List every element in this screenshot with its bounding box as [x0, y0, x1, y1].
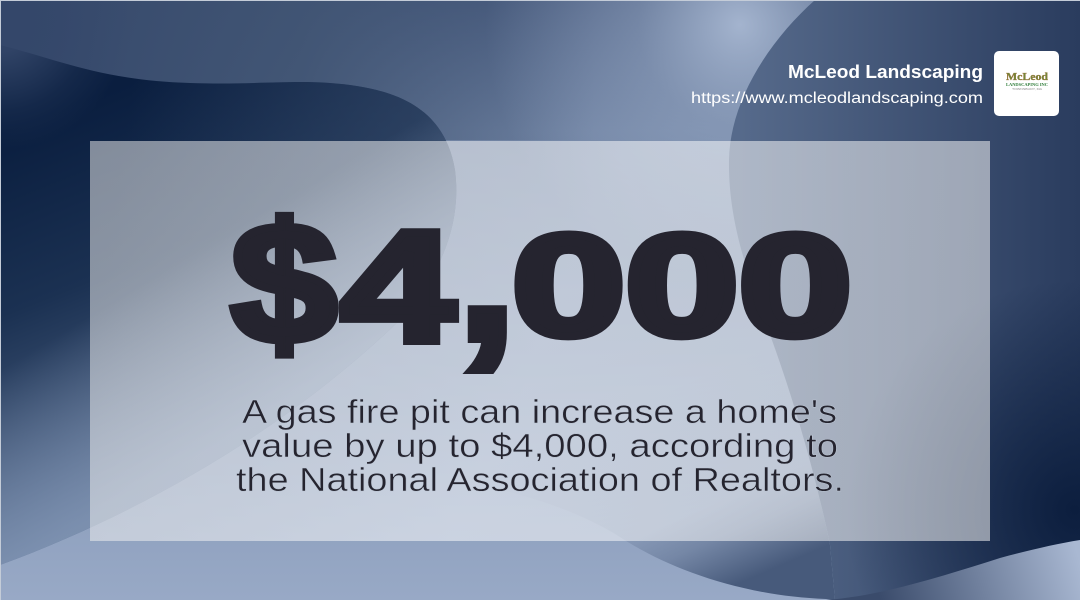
logo badge	[994, 51, 1059, 116]
company name and url	[691, 62, 983, 107]
logo badge: McLeod	[1006, 72, 1048, 83]
description text: value by up to $4,000, according to	[242, 428, 838, 465]
logo badge: TOWNSBURY, MA	[1012, 88, 1042, 91]
description text: the National Association of Realtors.	[236, 462, 844, 499]
headline stat: $4,000: $	[231, 189, 337, 379]
headline stat: $4,000: 4	[341, 199, 455, 375]
logo badge: LANDSCAPING INC	[1006, 82, 1048, 87]
headline stat: $4,000	[231, 159, 852, 382]
headline stat: $4,000: 000	[512, 205, 852, 366]
description text	[236, 394, 844, 499]
company name and url: McLeod Landscaping	[788, 62, 983, 82]
company name and url: https://www.mcleodlandscaping.com	[691, 90, 983, 107]
description text: A gas fire pit can increase a home's	[242, 394, 837, 431]
headline stat: $4,000: ,	[457, 159, 517, 382]
panel: translucent stat card	[90, 141, 990, 541]
